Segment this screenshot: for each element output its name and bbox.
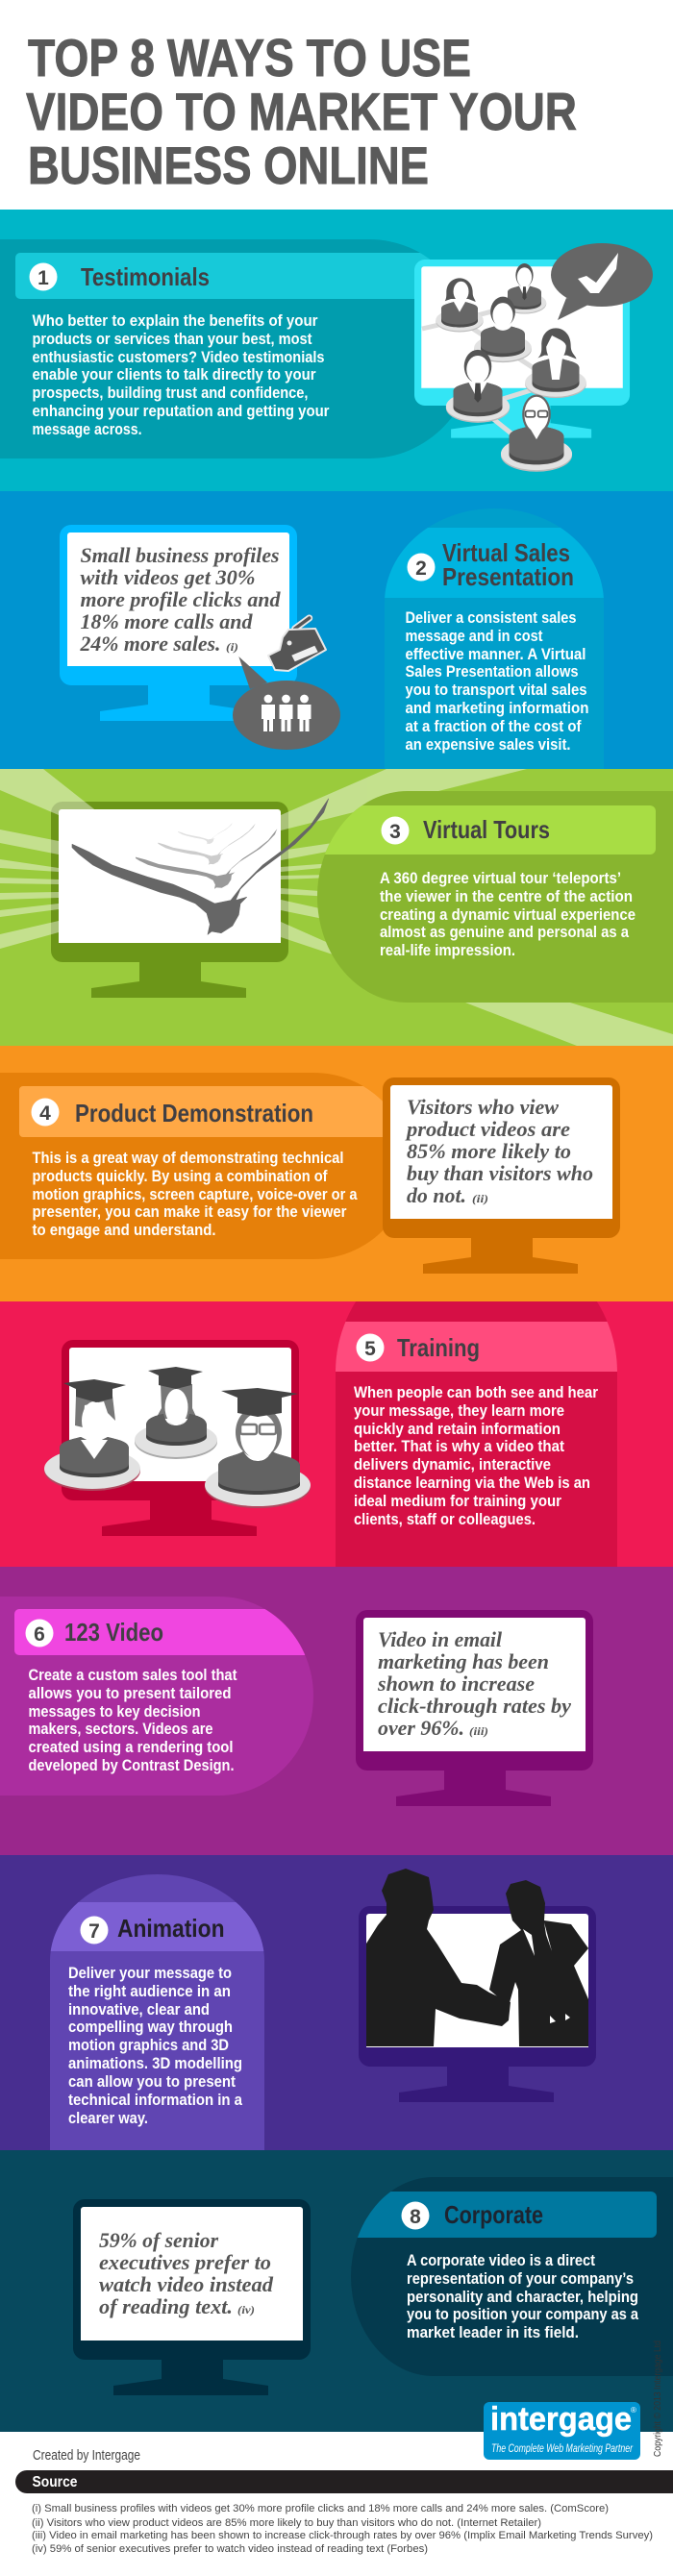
text block: training: quickly and retain information bbox=[354, 1420, 561, 1438]
text block: training: your message, they learn more bbox=[354, 1401, 564, 1420]
source references: (iii) Video in email marketing has been shown to increase click-through rates by over 96% (Implix Email Marketing Trends Survey) bbox=[32, 2530, 653, 2541]
source references: (ii) Visitors who view product videos are 85% more likely to buy than visitors who do not. (Internet Retailer) bbox=[32, 2517, 541, 2529]
quote: visitors who view bbox=[405, 1095, 593, 1207]
quote: video in email: click-through rates by bbox=[378, 1694, 571, 1718]
copyright note: Copyright © 2013 Intergage Ltd bbox=[653, 2341, 663, 2457]
heading bar: training: 5 bbox=[364, 1338, 376, 1360]
source references bbox=[32, 2503, 653, 2555]
text block: product demonstration: presenter, you can make it easy for the viewer bbox=[33, 1202, 347, 1221]
text block: animation: technical information in a bbox=[68, 2091, 242, 2109]
heading bar: 123 video bbox=[14, 1609, 322, 1655]
text block: animation: compelling way through bbox=[68, 2018, 233, 2036]
text block: virtual sales presentation: message and in cost bbox=[406, 627, 543, 645]
text block: 123 video: allows you to present tailored bbox=[29, 1684, 231, 1702]
text block: 123 video: developed by Contrast Design. bbox=[29, 1756, 235, 1774]
text block: product demonstration bbox=[33, 1149, 358, 1239]
heading bar: training bbox=[327, 1322, 625, 1372]
text block: corporate: A corporate video is a direct bbox=[407, 2251, 595, 2269]
text block: animation: innovative, clear and bbox=[68, 2000, 210, 2019]
heading bar: virtual sales presentation: Virtual Sales bbox=[442, 538, 570, 567]
icon: business handshake silhouettes bbox=[366, 1869, 588, 2046]
quote: senior executives bbox=[99, 2228, 274, 2318]
text block: animation: the right audience in an bbox=[68, 1982, 231, 2000]
heading bar: testimonials: 1 bbox=[37, 267, 49, 289]
text block: training: distance learning via the Web is an bbox=[354, 1474, 590, 1492]
text block: 123 video bbox=[29, 1666, 237, 1774]
text block: virtual tours: A 360 degree virtual tour ‘teleports’ bbox=[380, 869, 621, 887]
quote: visitors who view: product videos are bbox=[405, 1117, 570, 1141]
monitor: testimonials bbox=[414, 260, 630, 438]
quote: video in email bbox=[377, 1627, 571, 1740]
text block: testimonials: enthusiastic customers? Video testimonials bbox=[33, 348, 325, 366]
text block: product demonstration: This is a great way of demonstrating technical bbox=[33, 1149, 344, 1167]
panel: training bbox=[336, 1301, 617, 1567]
heading bar: 123 video: 123 Video bbox=[64, 1618, 163, 1647]
monitor: virtual tours screen bbox=[59, 809, 281, 943]
section 3: virtual tours bbox=[0, 769, 673, 1046]
text block: testimonials: enable your clients to talk directly to your bbox=[33, 365, 316, 384]
text block: corporate: you to position your company as a bbox=[407, 2305, 638, 2323]
icon: speech bubble with audience bbox=[233, 656, 340, 750]
heading bar: product demonstration: Product Demonstration bbox=[75, 1099, 313, 1127]
quote: senior executives: of reading text. bbox=[99, 2294, 233, 2318]
quote: video in email: shown to increase bbox=[377, 1672, 535, 1696]
logo: intergage bbox=[484, 2401, 640, 2460]
section 4: product demonstration bbox=[0, 1046, 673, 1301]
source references: (iv) 59% of senior executives prefer to watch video instead of reading text (Forbes) bbox=[32, 2543, 428, 2555]
text block: animation: clearer way. bbox=[68, 2109, 148, 2127]
text block: animation bbox=[68, 1964, 242, 2127]
source references: (i) Small business profiles with videos get 30% more profile clicks and 18% more calls and 24% more sales. (ComScore) bbox=[32, 2503, 609, 2514]
quote: video in email: over 96%. bbox=[378, 1716, 464, 1740]
text block: testimonials: message across. bbox=[33, 420, 142, 438]
heading bar: virtual tours bbox=[308, 805, 656, 855]
quote: small business profiles: 24% more sales. bbox=[80, 632, 221, 656]
heading bar: virtual sales presentation: 2 bbox=[415, 557, 427, 580]
created by credit: Created by Intergage bbox=[33, 2447, 140, 2464]
monitor: virtual sales presentation bbox=[60, 525, 297, 721]
panel: 123 video bbox=[0, 1597, 313, 1796]
logo: intergage: intergage bbox=[490, 2401, 632, 2438]
quote: small business profiles: more profile clicks and bbox=[81, 587, 281, 611]
title: BUSINESS ONLINE bbox=[28, 136, 429, 195]
section 2: virtual sales presentation bbox=[0, 491, 673, 769]
text block: virtual sales presentation: effective manner. A Virtual bbox=[406, 645, 586, 663]
monitor: 123 video bbox=[356, 1610, 593, 1806]
text block: virtual sales presentation: an expensive sales visit. bbox=[406, 735, 571, 754]
monitor: training bbox=[62, 1340, 299, 1536]
quote: video in email: marketing has been bbox=[378, 1649, 549, 1673]
source bar bbox=[15, 2470, 673, 2493]
quote: senior executives: watch video instead bbox=[99, 2272, 274, 2296]
quote: small business profiles: 18% more calls and bbox=[81, 609, 253, 633]
quote: visitors who view: do not. bbox=[407, 1183, 466, 1207]
title: VIDEO TO MARKET YOUR bbox=[26, 83, 577, 141]
graduate: right with glasses bbox=[205, 1388, 311, 1508]
text block: training bbox=[354, 1383, 598, 1528]
text block: animation: motion graphics and 3D bbox=[68, 2036, 229, 2054]
text block: training: better. That is why a video that bbox=[354, 1437, 564, 1455]
icon: speech bubble with check mark bbox=[551, 243, 653, 320]
text block: virtual sales presentation: and marketing information bbox=[406, 699, 588, 717]
light rays bbox=[0, 769, 673, 1046]
quote: senior executives: 59% of senior bbox=[99, 2228, 218, 2252]
panel: virtual sales presentation bbox=[385, 508, 604, 769]
heading bar: testimonials bbox=[15, 253, 431, 299]
text block: training: clients, staff or colleagues. bbox=[354, 1510, 536, 1528]
text block: virtual tours: creating a dynamic virtual experience bbox=[380, 905, 636, 924]
text block: testimonials bbox=[33, 311, 330, 438]
panel: testimonials bbox=[0, 239, 475, 458]
quote: small business profiles: with videos get 30% bbox=[81, 565, 256, 589]
text block: virtual tours bbox=[380, 869, 636, 959]
heading bar: virtual tours: 3 bbox=[389, 821, 401, 843]
quote: video in email: Video in email bbox=[378, 1627, 503, 1651]
text block: product demonstration: products quickly. By using a combination of bbox=[33, 1167, 328, 1185]
monitor: animation bbox=[359, 1906, 596, 2102]
text block: animation: animations. 3D modelling bbox=[68, 2054, 242, 2072]
text block: testimonials: prospects, building trust and confidence, bbox=[33, 384, 308, 402]
text block: 123 video: makers, sectors. Videos are bbox=[29, 1720, 213, 1738]
person: man bottom left bbox=[446, 350, 510, 423]
text block: product demonstration: motion graphics, screen capture, voice-over or a bbox=[33, 1185, 358, 1203]
quote: senior executives: executives prefer to bbox=[99, 2250, 271, 2274]
quote: small business profiles bbox=[80, 543, 281, 656]
text block: corporate bbox=[407, 2251, 638, 2341]
quote: small business profiles: Small business profiles bbox=[81, 543, 279, 567]
graduate: middle bbox=[135, 1367, 217, 1459]
heading bar: product demonstration bbox=[19, 1086, 413, 1137]
title bbox=[26, 29, 577, 195]
heading bar: virtual tours: Virtual Tours bbox=[423, 815, 550, 844]
text block: virtual sales presentation bbox=[406, 608, 588, 754]
heading bar: corporate: 8 bbox=[410, 2206, 421, 2228]
network connectors bbox=[422, 303, 556, 454]
text block: training: delivers dynamic, interactive bbox=[354, 1455, 551, 1474]
quote: visitors who view: buy than visitors who bbox=[407, 1161, 593, 1185]
source bar: Source bbox=[33, 2474, 78, 2490]
text block: animation: Deliver your message to bbox=[68, 1964, 232, 1982]
quote: video in email: (iii) bbox=[469, 1724, 488, 1738]
heading bar: virtual sales presentation bbox=[375, 528, 615, 598]
text block: virtual sales presentation: Sales Presentation allows bbox=[406, 662, 579, 681]
section 5: training bbox=[0, 1301, 673, 1567]
quote: visitors who view: Visitors who view bbox=[407, 1095, 559, 1119]
logo: intergage: ® bbox=[631, 2406, 636, 2415]
panel: virtual tours bbox=[317, 791, 673, 1003]
text block: training: When people can both see and hear bbox=[354, 1383, 598, 1401]
text block: virtual sales presentation: you to transport vital sales bbox=[406, 681, 586, 699]
heading bar: animation: Animation bbox=[117, 1914, 225, 1943]
quote: visitors who view: (ii) bbox=[472, 1192, 488, 1205]
person: man centre bbox=[474, 297, 532, 362]
text block: corporate: market leader in its field. bbox=[407, 2323, 579, 2341]
text block: testimonials: enhancing your reputation and getting your bbox=[33, 402, 330, 420]
icon: bird in flight with trail bbox=[72, 799, 329, 934]
monitor: corporate bbox=[73, 2199, 311, 2395]
text block: corporate: representation of your company’s bbox=[407, 2269, 634, 2288]
text block: testimonials: Who better to explain the benefits of your bbox=[33, 311, 318, 330]
monitor: product demonstration bbox=[383, 1077, 620, 1274]
heading bar: corporate: Corporate bbox=[444, 2200, 543, 2229]
text block: training: ideal medium for training your bbox=[354, 1492, 561, 1510]
heading bar: corporate bbox=[346, 2192, 657, 2238]
person: woman top left bbox=[436, 278, 484, 333]
audience figures bbox=[262, 695, 312, 731]
section 8: corporate bbox=[0, 2150, 673, 2432]
section 1: testimonials bbox=[0, 210, 673, 491]
heading bar: animation: 7 bbox=[88, 1920, 100, 1943]
graduate: left bbox=[44, 1379, 140, 1491]
heading bar: 123 video: 6 bbox=[34, 1623, 45, 1646]
icon: video camera bbox=[268, 618, 326, 671]
text block: virtual sales presentation: at a fraction of the cost of bbox=[406, 717, 582, 735]
text block: virtual tours: the viewer in the centre of the action bbox=[380, 887, 633, 905]
quote: senior executives: (iv) bbox=[237, 2303, 255, 2316]
text block: virtual sales presentation: Deliver a consistent sales bbox=[406, 608, 577, 627]
text block: 123 video: Create a custom sales tool that bbox=[29, 1666, 237, 1684]
text block: product demonstration: to engage and understand. bbox=[33, 1221, 215, 1239]
heading bar: training: Training bbox=[397, 1333, 480, 1362]
person: man top right bbox=[503, 263, 546, 314]
text block: 123 video: messages to key decision bbox=[29, 1702, 200, 1721]
text block: testimonials: products or services than your best, most bbox=[33, 330, 312, 348]
panel: corporate bbox=[351, 2177, 673, 2376]
person: woman right bbox=[525, 328, 586, 398]
section 7: animation bbox=[0, 1855, 673, 2150]
panel: product demonstration bbox=[0, 1073, 410, 1259]
text block: corporate: personality and character, helping bbox=[407, 2288, 638, 2306]
quote: visitors who view: 85% more likely to bbox=[407, 1139, 571, 1163]
heading bar: product demonstration: 4 bbox=[39, 1102, 51, 1125]
title: TOP 8 WAYS TO USE bbox=[28, 29, 471, 87]
heading bar: animation bbox=[50, 1902, 263, 1951]
section 6: 123 video bbox=[0, 1567, 673, 1855]
text block: 123 video: created using a rendering tool bbox=[29, 1738, 233, 1756]
text block: virtual tours: real-life impression. bbox=[380, 941, 515, 959]
text block: virtual tours: almost as genuine and personal as a bbox=[380, 923, 629, 941]
person: man with glasses bbox=[501, 394, 572, 472]
text block: animation: can allow you to present bbox=[68, 2072, 236, 2091]
monitor: virtual tours frame bbox=[51, 802, 288, 998]
quote: small business profiles: (i) bbox=[226, 640, 238, 654]
panel: animation bbox=[50, 1874, 264, 2150]
heading bar: virtual sales presentation: Presentation bbox=[442, 562, 574, 591]
heading bar: testimonials: Testimonials bbox=[81, 262, 210, 291]
